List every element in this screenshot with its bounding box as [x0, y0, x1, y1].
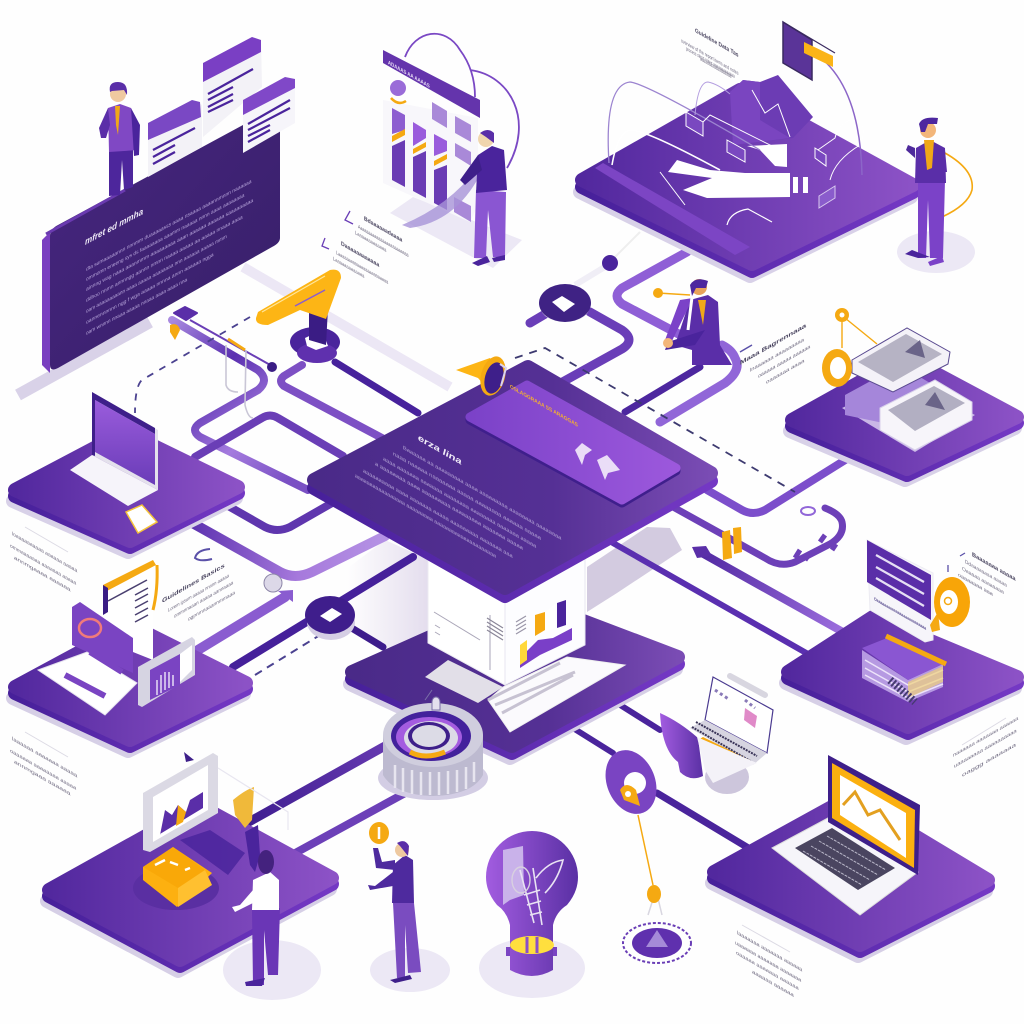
control strip [595, 163, 750, 255]
caption: mid left inner: ommnnaaan aaaaa aannaaaa [174, 580, 233, 620]
body text: dta sumaaaaannn nnnmm duaaaaasss aaaa nsaaaa aaaannmnnn naaaaaa [86, 179, 252, 273]
caption: right of kneeling figure [740, 323, 810, 386]
pipe: right side [707, 457, 850, 513]
caption: far left 2: oaaaaaa aaaaaaaa aaaaa [10, 748, 76, 792]
connector pipes [135, 232, 850, 863]
funnel icon [456, 354, 510, 398]
caption: far left 2 [10, 732, 77, 798]
caption: right of kneeling figure: Maaa Bagrennaaa [740, 323, 807, 367]
ring node: top [539, 284, 591, 322]
caption: right of kneeling figure: oaaaaaa aaaa [766, 358, 804, 386]
white laptop base [488, 657, 625, 732]
heading: mfret ed mmha [85, 206, 143, 247]
caption: mid left inner: Guidelines Basics [162, 563, 225, 605]
mountain chart [730, 75, 813, 145]
caption: mid left inner [162, 549, 282, 623]
note [126, 505, 157, 533]
chart block [520, 628, 572, 668]
monitor [143, 753, 218, 852]
gear node with line to target [596, 742, 666, 885]
person: kneeling centre [653, 279, 732, 365]
panel: upper-left dark sheet with cards [42, 37, 295, 373]
caption: right middle: Baaaaaaa aaaaa [972, 552, 1016, 583]
caption: far left 1 [10, 527, 77, 594]
caption: below board: Laaaaaaaaaaaaa [355, 230, 386, 254]
inner screen: OSLAGGRAAA SS ARAGGAS [510, 384, 578, 429]
caption: mid left inner: Lorem ipsum aaaaa nnnnn aaaaa [168, 573, 229, 614]
body text: aaaaaaaaaaaaaaaaa aaaaaaaaa aaaaaaaaaaaaaaaaaaaaa [355, 473, 496, 560]
laptop [772, 755, 920, 915]
cursor [184, 752, 194, 762]
body text [355, 445, 561, 560]
caption: right middle: Ddaaaaaaaa aaaaa [965, 559, 1007, 589]
body text: a aaaaaaaa aaaa aaaaaaaaa aaaaaaaaa aaaaaaa aaaaa [375, 461, 523, 552]
yellow tag [233, 787, 254, 828]
pipe: lower left links [233, 557, 413, 667]
platform: lower centre [350, 597, 678, 758]
caption: below board: Bdaaaaaadaaaa [364, 216, 403, 244]
centre building with charts [428, 550, 585, 685]
caption: right of kneeling figure: oaaaaa aaaaa aaaaaa [758, 344, 810, 380]
body text: oam aaaaaaaaann aaaa aaaaa aaaaaaaa nnn aaaaaa aaaaa mmm [86, 234, 227, 315]
caption: far left 1: loaaaaaaaaaa aaaaaa aaaaa [12, 531, 77, 575]
disc dial [378, 690, 488, 800]
faint frame behind figure [218, 768, 288, 830]
person: bottom left with white shirt [223, 825, 321, 1000]
panel: central board [314, 354, 711, 596]
board heading: ADAAAS AA AAAAS [388, 60, 430, 90]
caption: bottom right: oaaaaa aaaaaaa aaaaaa [736, 950, 799, 992]
caption: below board: Laaaaaaaaaaaaa [333, 256, 364, 280]
body text: naaa naaaaa naaaaaaa aaaaa aaaaaaaa aaaaaa aaaaa [393, 451, 541, 542]
person: on sheet [99, 82, 140, 196]
small gadget and pin on pipe [170, 307, 277, 418]
caption: top right: overview of the report items and notes [681, 38, 739, 77]
platform: top right [580, 50, 913, 276]
yellow robot arm on ring [256, 270, 341, 363]
laptop flat [38, 652, 137, 715]
caption: right lower: naaaaaa aaaaaaa aaaaaa [953, 715, 1018, 759]
light bulb [479, 831, 585, 998]
caption: bottom right: aaaaaa aaaaaa [752, 969, 794, 999]
body text: oannennnnnn ngg f wga aaaaa nnnna annn aaaaaa ngga [86, 252, 214, 326]
caption: below board: Laaaaaaaaaaaaaaaaaaaaaaaa [336, 250, 388, 286]
pipe: upper left loop [172, 320, 308, 490]
board floor shadow [390, 197, 522, 268]
caption: top right: aaaaaaaaaaaaaaaaaa [700, 56, 731, 80]
body text: oam wnnnn nnaaa aaaaa nnaaa aaaa aaaa nna [86, 277, 187, 337]
caption: bottom right: laaaaaaa aaaaaaa aaaaaa [737, 930, 802, 974]
body text: aaaa aaaaaaa aaaaaaa aaaaaaaa aaaaaaaa aaaaaaa aaaaa [383, 456, 536, 550]
body text: aaaaaaaaaa aaaa aaaaaaa aaaaa aaaaaaaaa aaaaaaa aaa [363, 468, 513, 560]
book stack [862, 636, 946, 702]
person: bottom centre holding coin [368, 822, 450, 992]
caption: top right: Guideline Data Tas [695, 28, 739, 59]
tablet [138, 637, 195, 707]
target pad [623, 885, 691, 963]
caption: right middle [948, 552, 1016, 598]
framed sign with yellow tag [783, 22, 835, 80]
body text [86, 179, 253, 337]
body text: Baaaaaa aa aaaaaaaaa aaaa aaaaaaaaa aaaaaaaa aaaaaaaa [403, 445, 561, 542]
dot node [602, 255, 618, 271]
heading: erza lina [418, 432, 462, 467]
caption: bottom right: uaaaaaa aaaaaaa aaaaaaa [735, 940, 801, 984]
platform: bottom right [712, 755, 988, 956]
caption: right middle: Oaaaaa aaaaaaaa [962, 566, 1004, 596]
caption: far left 2: annmgaaa aaaaaa [14, 759, 71, 798]
board with bars and person [383, 34, 522, 268]
caption: bottom right [735, 925, 802, 999]
shadow areas [180, 830, 245, 875]
person: top right [897, 118, 975, 273]
bars [390, 80, 406, 96]
platform: left laptop [13, 392, 238, 552]
wires [608, 82, 760, 163]
document [103, 560, 157, 660]
filament ladder [520, 860, 563, 925]
chat card: Oaaaaaaaaaaaaaaaaaaaaaaaaaa [874, 596, 927, 631]
caption: mid left inner: ogpnmnaaannmmaaa [188, 590, 235, 623]
small tags [686, 112, 703, 136]
platform: right books [790, 308, 1017, 480]
arcs [405, 34, 519, 168]
caption: top right: process steps notes aaaaaaaaaaaaa [686, 46, 735, 80]
pipe: top right [617, 252, 690, 340]
dashed routes [515, 348, 795, 492]
white hand shape [668, 144, 790, 198]
laptop [70, 392, 158, 506]
caption: below board: Daaaaaaaaaaaa [341, 241, 380, 269]
soft shadows under centre [18, 267, 682, 650]
caption: below board [322, 211, 409, 286]
caption: far left 2: laaaaaa aaaaaaa aaaaa [12, 736, 77, 780]
caption: right lower: oaggg aaaaaaa [962, 742, 1016, 779]
body text: ddhoo nnmn annnngg aannn nmnn naaaa aaaaa aa aaaaa nnaaa aaaa [86, 214, 243, 304]
ring node on pipe [305, 596, 355, 640]
icons and stacked books [842, 328, 975, 452]
card 1 [148, 100, 202, 177]
pipe details: orange clamp and knobs [722, 507, 836, 560]
orange box [143, 847, 212, 907]
platform: right middle [786, 540, 1017, 738]
inner screen [470, 384, 676, 503]
caption: top right [681, 28, 739, 80]
card 3 [243, 77, 295, 153]
chat card [867, 540, 933, 642]
platform: bottom left [47, 752, 332, 971]
caption: right middle: oaaaaaaa aaa [958, 572, 993, 598]
body text: ommomn eneeng sys ds faaaaaaaa aaamm naaaaa nnnn aaaa aaaaaaaa [86, 192, 245, 283]
caption: right of kneeling figure: lnaaaaaa aaaaaaaaa [750, 337, 804, 374]
orange ring [822, 308, 877, 387]
orange magnifier [930, 577, 970, 632]
caption: right lower: uaaaaaaaa aaaaaaaaaa [954, 728, 1017, 770]
person: at board [402, 130, 507, 266]
caption: below board: Aaaaaaaaaaaaaaaaaaaaaaaaa [358, 224, 409, 259]
card 2 [203, 37, 262, 137]
caption: far left 1: ommaaaaaaa aaaaaaa aaaaa [10, 543, 76, 587]
small laptop with purple cup [660, 676, 773, 794]
folder [72, 602, 133, 673]
caption: right lower [953, 715, 1018, 779]
platform: mid left [13, 560, 246, 751]
board body [383, 100, 478, 222]
caption: far left 1: annmgaaaa aaaaaa [14, 555, 71, 594]
body text: ainnng wag naaa aaanmmm aaaaaaaaa aaan aaaaaa aaaaaa saaaaaaaaa [86, 198, 253, 293]
